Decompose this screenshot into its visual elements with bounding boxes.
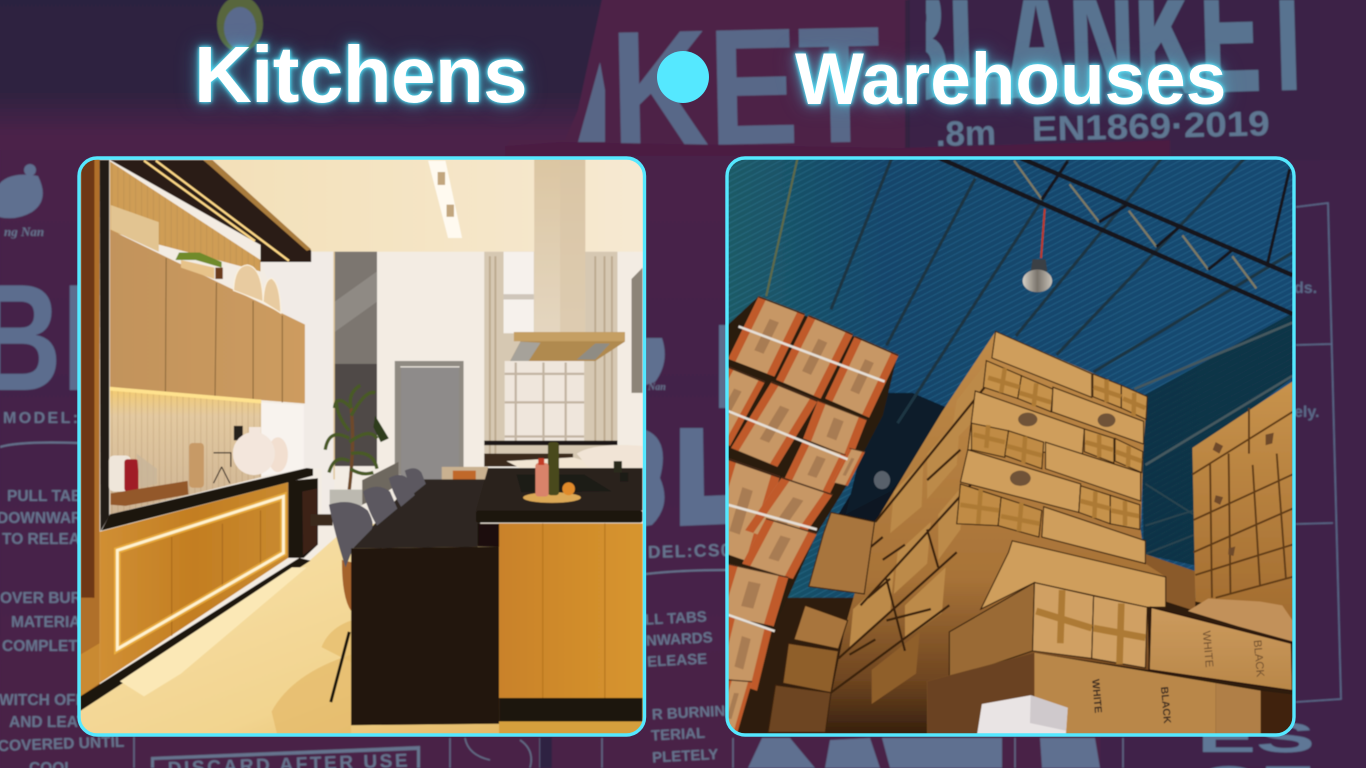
background: printed fire blanket packaging: ely. [1294,404,1320,421]
background: printed fire blanket packaging: PLETELY [652,746,719,767]
background: printed fire blanket packaging: COMPLETELY [2,638,107,655]
ceiling soffit with LED lines [110,160,311,262]
background: printed fire blanket packaging: DEL:CS0 [648,540,732,562]
upper cabinets [110,205,305,403]
center stack left face seams [831,385,986,693]
right front box: BLACK [1251,639,1266,678]
frame: warehouse photo border [727,158,1294,735]
background: printed fire blanket packaging: LL TABS [645,609,707,629]
bar stools [329,468,426,702]
console table [362,462,398,505]
counter objects [109,426,288,506]
backsplash with under-cabinet glow [110,387,304,514]
background: printed fire blanket packaging: .8m [935,114,996,154]
white boxes [977,695,1068,734]
black counter top [101,468,313,531]
island top [476,468,643,523]
background: printed fire blanket packaging: WITCH OFF [0,692,85,709]
bottom large box: WHITE [1089,679,1103,714]
hanging lamp [1023,209,1052,292]
kitchen wall and ceiling [70,150,650,745]
center stack boxes [957,331,1166,609]
roof ribs [766,158,798,296]
background: printed fire blanket packaging: MATERIAL [11,614,90,631]
background: printed fire blanket packaging: AND LEAVE [9,714,97,731]
background: printed fire blanket packaging: PULL TABS [7,488,93,505]
marble column [333,252,377,479]
lower left plain boxes [768,512,875,732]
bar counter top [353,479,485,548]
right stack of boxes [1145,381,1293,621]
background: printed fire blanket packaging: NWARDS [646,629,713,650]
background: printed fire blanket packaging: TO RELEASE [2,531,101,548]
wine fridge [288,478,318,558]
center stack left face tape patches [849,392,981,704]
left edge column [80,158,100,700]
background: printed fire blanket packaging: ds. [1294,280,1317,297]
background: printed fire blanket packaging: ES [1197,714,1315,761]
door [395,361,464,481]
large front box [949,583,1147,679]
potted plant [325,385,389,506]
background: printed fire blanket packaging: MODEL: [3,410,81,427]
range hood [510,158,625,361]
glass domes [233,265,281,313]
sofa behind island [442,445,643,484]
background: printed fire blanket packaging: COVERED UNTIL [0,734,125,755]
background: printed fire blanket packaging: EN1869·2019 [1031,104,1270,149]
distant lamp [874,471,890,489]
background: printed fire blanket packaging: OVER BURNING [0,590,121,607]
shelf plant [175,252,223,279]
floor [80,514,647,742]
background: printed fire blanket packaging: TERIAL [651,725,706,745]
title: Warehouses: Warehouses [795,39,1226,120]
right front box [1149,599,1293,691]
bottom large box [927,653,1293,734]
tape marks and paw prints [960,368,1145,531]
left stack backing [720,296,898,732]
panel: warehouse photo [728,160,1292,734]
panel: kitchen photo [70,150,650,745]
title: Kitchens: Kitchens [194,30,527,119]
center dot separator [657,51,709,103]
wooden island front [499,523,643,737]
background: printed fire blanket packaging: R BURNING [651,702,737,724]
background: printed fire blanket packaging: DOWNWARDS [0,510,104,527]
left stack of orange boxes [693,296,899,732]
roof ribs and trusses [831,158,1293,554]
right front box: WHITE [1200,630,1215,668]
background: printed fire blanket packaging: Nan [647,382,666,393]
bottom large box: BLACK [1158,686,1172,725]
bottles and cutting board [523,442,628,503]
black frame post [100,160,109,531]
background: printed fire blanket packaging: ELEASE [647,651,708,671]
frame: kitchen photo border [79,158,644,735]
curtains and window [484,252,643,466]
center stack base [812,331,1166,742]
upper wall slats [110,161,260,271]
lower cabinet with neon rectangle [80,482,288,696]
bar counter front [351,524,500,725]
corrugated blue roof [720,150,1300,745]
background: printed fire blanket packaging: ng Nan [4,224,44,239]
